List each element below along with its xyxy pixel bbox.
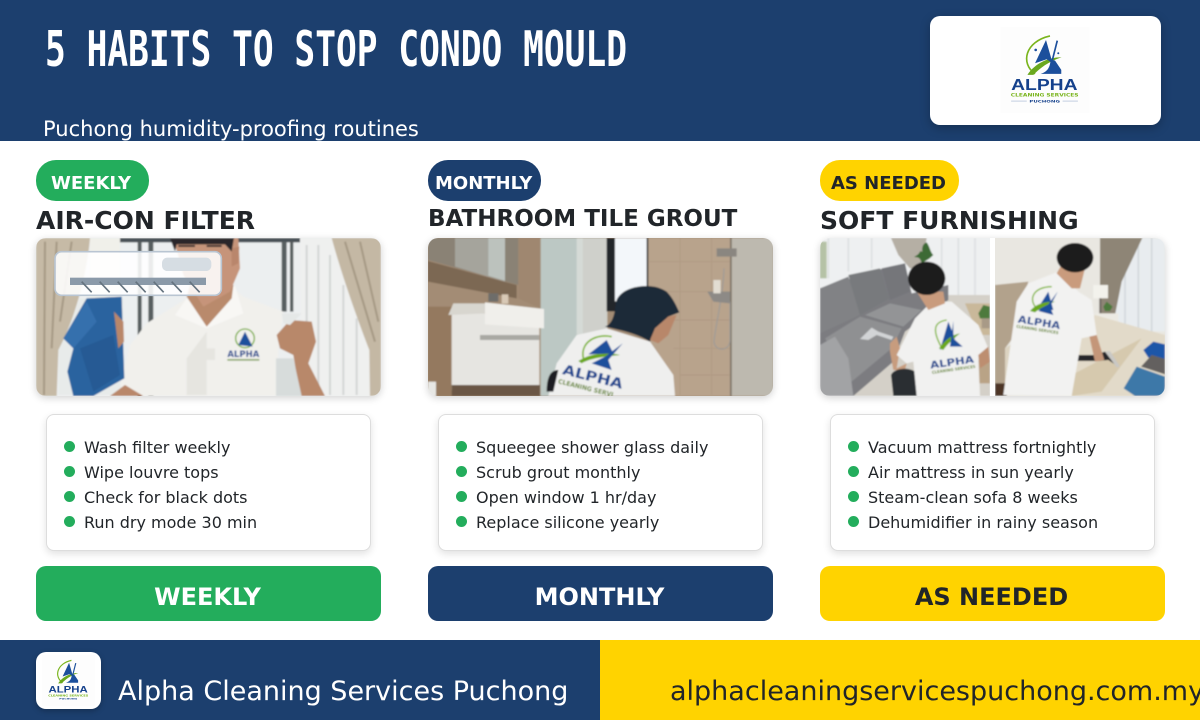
tips card (438, 414, 763, 551)
photo: sofa steam clean (820, 238, 990, 396)
badge: monthly (428, 160, 541, 201)
photo: bathroom cleaning (428, 238, 773, 396)
bullet 4: Dehumidifier in rainy season (868, 513, 1098, 532)
frequency button: as needed (820, 566, 1165, 621)
logo: Alpha Cleaning Services small: ALPHA (48, 684, 88, 694)
bullet 1: Squeegee shower glass daily (476, 438, 708, 457)
heading: bathroom tile grout: BATHROOM TILE GROUT (428, 206, 737, 232)
bullet 2: Wipe louvre tops (84, 463, 219, 482)
photo pair: sofa and mattress cleaning (820, 238, 1165, 396)
logo: Alpha Cleaning Services: CLEANING SERVICES (1011, 93, 1079, 99)
photo: cleaner with air-con overlay (36, 238, 381, 396)
bullet 3: Open window 1 hr/day (476, 488, 656, 507)
bullet 2: Scrub grout monthly (476, 463, 640, 482)
footer: website (600, 640, 1200, 720)
air-con unit overlay (55, 252, 221, 295)
logo: Alpha Cleaning Services (1011, 35, 1079, 103)
frequency button: monthly (428, 566, 773, 621)
logo: Alpha Cleaning Services: PUCHONG (1029, 99, 1060, 103)
column 1: air-con filter (32, 160, 384, 621)
header logo card (930, 16, 1161, 125)
subtitle: Puchong humidity-proofing routines (43, 117, 419, 141)
photo: cleaner with air-con overlay: ALPHA (227, 350, 260, 360)
photo: sofa steam clean: ALPHA (930, 355, 975, 372)
photo: bathroom cleaning: ALPHA (561, 362, 625, 393)
column 3: soft furnishing (816, 160, 1168, 621)
photo: sofa steam clean: CLEANING SERVICES (932, 364, 976, 375)
tips card (46, 414, 371, 551)
logo: Alpha Cleaning Services small: PUCHONG (59, 699, 78, 701)
badge: monthly: MONTHLY (435, 173, 532, 194)
frequency button: weekly: WEEKLY (154, 583, 261, 611)
column 2: bathroom tile grout (424, 160, 776, 621)
photo: mattress steam clean (995, 238, 1165, 396)
website url: alphacleaningservicespuchong.com.my (670, 676, 1200, 707)
bullet 3: Check for black dots (84, 488, 248, 507)
bullet 1: Vacuum mattress fortnightly (868, 438, 1096, 457)
frequency button: monthly: MONTHLY (535, 583, 664, 611)
footer: brand (0, 640, 600, 720)
bullet 3: Steam-clean sofa 8 weeks (868, 488, 1078, 507)
bullet 2: Air mattress in sun yearly (868, 463, 1074, 482)
bullet 4: Run dry mode 30 min (84, 513, 257, 532)
footer brand name: Alpha Cleaning Services Puchong (118, 676, 568, 707)
photo: mattress steam clean: ALPHA (1017, 315, 1061, 332)
logo: Alpha Cleaning Services small (48, 660, 88, 701)
heading: soft furnishing: SOFT FURNISHING (820, 206, 1079, 235)
frequency button: weekly (36, 566, 381, 621)
bullet 4: Replace silicone yearly (476, 513, 659, 532)
bullet 1: Wash filter weekly (84, 438, 230, 457)
tips card (830, 414, 1155, 551)
badge: as needed: AS NEEDED (831, 173, 946, 194)
frequency button: as needed: AS NEEDED (915, 583, 1068, 611)
header band (0, 0, 1200, 141)
heading: air-con filter: AIR-CON FILTER (36, 206, 255, 235)
logo: Alpha Cleaning Services small: CLEANING SERVICES (48, 693, 88, 697)
footer logo card (36, 652, 101, 709)
badge: weekly: WEEKLY (51, 173, 131, 194)
logo: Alpha Cleaning Services: ALPHA (1011, 77, 1078, 94)
badge: weekly (36, 160, 149, 201)
photo: mattress steam clean: CLEANING SERVICES (1016, 324, 1059, 335)
badge: as needed (820, 160, 959, 201)
